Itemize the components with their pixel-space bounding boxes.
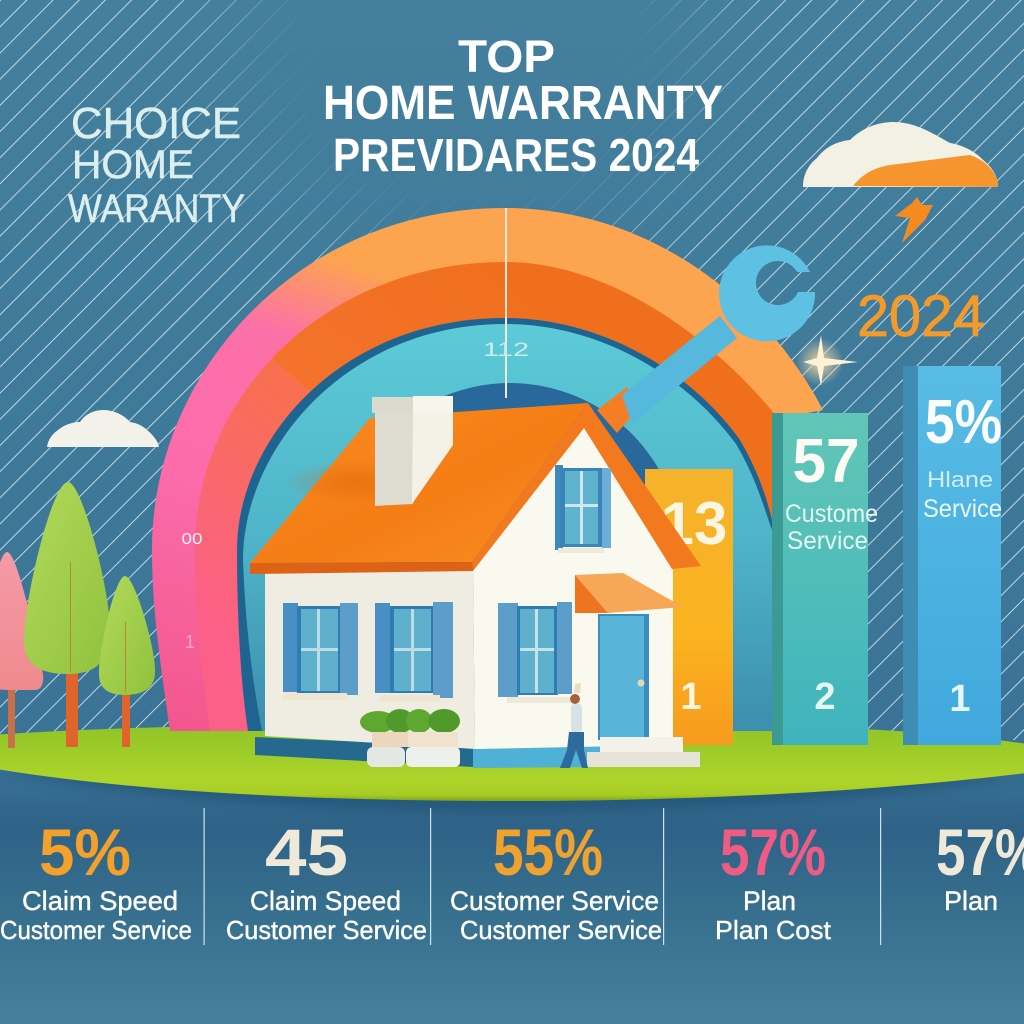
window: left (283, 603, 358, 700)
bar: teal: Service (787, 527, 868, 555)
stat: 57% plan cost: Plan Cost (715, 915, 832, 945)
tree: pink (0, 552, 43, 748)
stat: 5% claim speed (0, 815, 192, 945)
stat: 57% plan: Plan (944, 886, 998, 916)
roof eave (250, 562, 473, 574)
awning (575, 573, 683, 613)
arc band: coral to orange (195, 262, 773, 731)
icon: wrench (597, 245, 815, 433)
arc scale label: 112 (483, 340, 529, 361)
sparkle (796, 335, 858, 386)
stat: 57% plan cost: 57% (720, 815, 826, 889)
title: HOME WARRANTY (323, 77, 723, 130)
brand: Choice Home Warranty: CHOICE (71, 99, 241, 148)
stat: 55% customer service: Customer Service (460, 915, 662, 945)
stat: 45 claim speed: Customer Service (226, 915, 427, 945)
bar: teal: 57 (792, 427, 860, 496)
tree: green small (99, 576, 155, 747)
planters (360, 709, 460, 767)
stat: 5% claim speed: Customer Service (0, 915, 192, 945)
bar: teal (772, 413, 878, 745)
brand: Choice Home Warranty (68, 99, 245, 231)
stat: 45 claim speed: Claim Speed (250, 886, 401, 916)
rainbow arc gauge (152, 208, 823, 731)
stat: 5% claim speed: 5% (39, 815, 131, 889)
roof gable edge (472, 403, 701, 571)
window: upper gable (555, 465, 611, 553)
roof shadow (285, 460, 425, 504)
person (560, 683, 588, 768)
2024 label: 2024 (857, 284, 985, 349)
house base (255, 737, 473, 767)
bar: teal: Custome (785, 500, 878, 528)
window: middle (375, 602, 453, 702)
ground (0, 724, 1024, 812)
arc ring: navy (237, 318, 772, 731)
bar: blue: 5% (925, 388, 1002, 457)
bar: blue: Hlane (927, 467, 993, 492)
bar: teal: 2 (814, 676, 836, 718)
title (323, 31, 723, 181)
small cloud (47, 410, 159, 447)
wall: gable (473, 425, 673, 749)
stat: 5% claim speed: Claim Speed (22, 886, 178, 916)
title: TOP (458, 31, 555, 82)
arc inner navy (338, 383, 682, 729)
arc band: pink to light orange (152, 208, 823, 731)
roof (250, 403, 588, 563)
bar: yellow (645, 469, 733, 745)
bar: blue: Service (923, 495, 1002, 523)
brand: Choice Home Warranty: HOME (72, 143, 194, 187)
arc centre marker (505, 208, 507, 398)
window: right (498, 602, 572, 703)
bar: yellow: 13 (661, 490, 727, 557)
bar: blue: 1 (949, 678, 971, 720)
bar: blue (903, 366, 1002, 745)
arc band: teal (243, 324, 772, 731)
bar: yellow: 1 (680, 676, 702, 718)
title: PREVIDARES 2024 (333, 129, 699, 181)
stat: 55% customer service (450, 815, 662, 945)
stat: 55% customer service: Customer Service (450, 886, 659, 916)
arc left mark: 00 (182, 531, 203, 548)
house (250, 396, 701, 768)
wall: front left (265, 570, 475, 749)
tree: green large (24, 482, 110, 747)
stat: 45 claim speed: 45 (265, 815, 348, 889)
stat: 57% plan cost (715, 815, 832, 945)
diagonal hatch lines (0, 0, 1024, 740)
large cloud with lightning (803, 122, 998, 243)
door (598, 614, 649, 740)
stat: 45 claim speed (226, 815, 427, 945)
arc left mark (182, 531, 203, 652)
stat: 55% customer service: 55% (493, 815, 603, 889)
brand: Choice Home Warranty: WARANTY (68, 187, 245, 231)
steps (587, 737, 700, 767)
chimney (372, 396, 453, 506)
stat: 57% plan cost: Plan (743, 886, 796, 916)
arc left mark: 1 (185, 632, 195, 652)
